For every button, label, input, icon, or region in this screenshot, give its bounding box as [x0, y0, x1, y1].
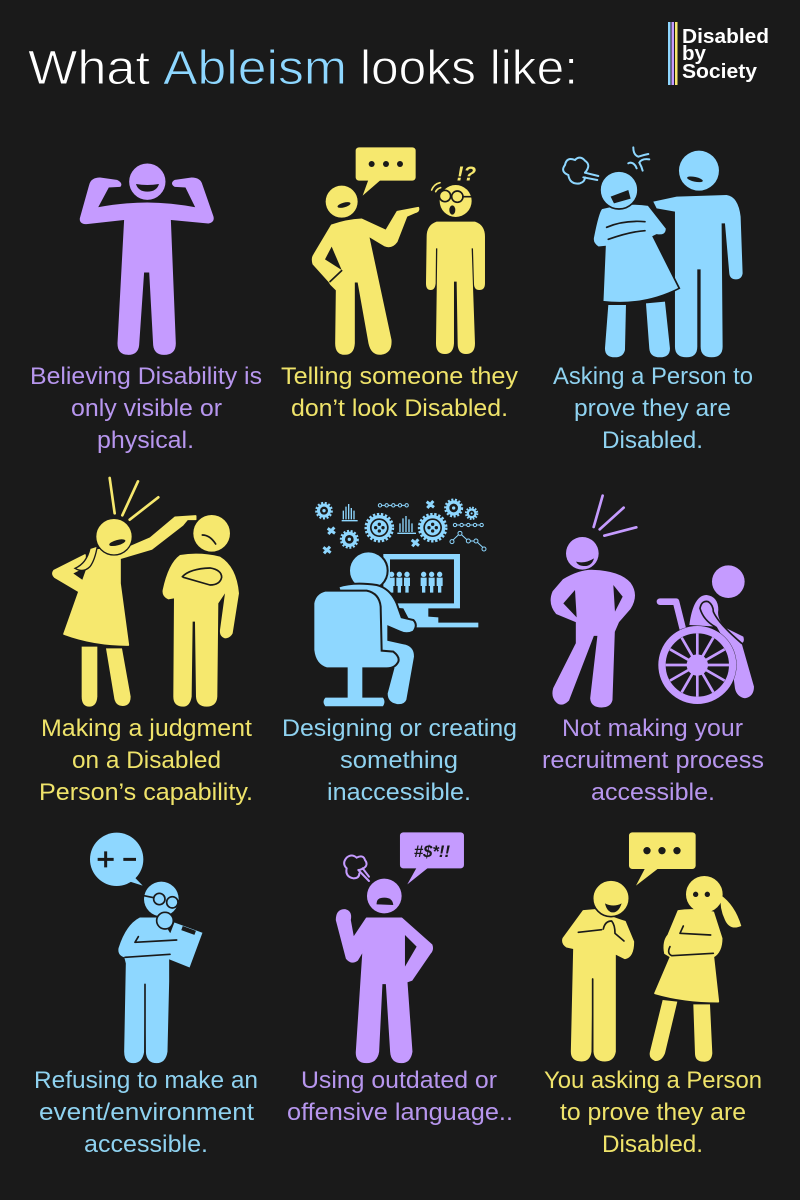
caption: outdated language — [287, 1067, 513, 1126]
caption: asking to prove — [553, 363, 753, 454]
caption: designing: Designing or creating — [282, 715, 517, 742]
panel: designing figure — [313, 500, 486, 707]
icon: person at chair — [313, 551, 416, 707]
icon: person with clipboard — [90, 833, 203, 1062]
caption: recruitment: accessible. — [591, 779, 715, 806]
caption: asking to prove: prove they are — [574, 395, 731, 422]
caption: you asking: You asking a Person — [544, 1067, 762, 1094]
caption: believing disability — [30, 363, 262, 454]
icon: monitor — [383, 554, 478, 627]
logo: Disabled by Society: Society — [682, 61, 758, 83]
caption: you asking: Disabled. — [602, 1131, 703, 1158]
caption: recruitment: recruitment process — [542, 747, 764, 774]
caption: you asking: to prove they are — [560, 1099, 746, 1126]
icon: standing person — [551, 496, 636, 707]
icon: two people talking — [313, 147, 485, 354]
caption: telling someone: Telling someone they — [281, 363, 518, 390]
logo: Disabled by Society: by — [682, 43, 707, 65]
icon: flexing person — [81, 163, 213, 354]
panel: judgment figure — [53, 478, 239, 707]
caption: designing: inaccessible. — [327, 779, 471, 806]
panel: event figures — [90, 832, 464, 1062]
caption: refusing: Refusing to make an — [34, 1067, 258, 1094]
logo: Disabled by Society — [668, 22, 769, 85]
panel: telling someone figure — [313, 147, 743, 357]
title: looks like: — [360, 42, 578, 95]
icon: gears and charts — [316, 500, 486, 553]
caption: refusing — [34, 1067, 258, 1158]
caption: telling someone — [281, 363, 518, 422]
icon: man and woman talking — [563, 832, 741, 1062]
title — [28, 42, 578, 95]
panel: asking to prove figure — [563, 832, 741, 1062]
title: What — [28, 42, 150, 95]
caption: judgment — [39, 715, 253, 806]
logo: Disabled by Society: Disabled — [682, 26, 769, 48]
caption: you asking — [544, 1067, 762, 1158]
caption: designing: something — [340, 747, 458, 774]
caption: asking to prove: Disabled. — [602, 427, 703, 454]
icon: woman pointing at man — [53, 478, 239, 707]
panel: recruitment figure — [551, 496, 754, 707]
caption: telling someone: don’t look Disabled. — [291, 395, 508, 422]
icon: angry person swearing — [337, 832, 464, 1062]
caption: refusing: event/environment — [39, 1099, 254, 1126]
caption: judgment: Making a judgment — [41, 715, 252, 742]
icon: wheelchair user — [658, 565, 754, 704]
caption: believing disability: Believing Disability is — [30, 363, 262, 390]
caption: judgment: on a Disabled — [72, 747, 221, 774]
caption: designing — [282, 715, 517, 806]
caption: believing disability: only visible or — [71, 395, 222, 422]
caption: judgment: Person’s capability. — [39, 779, 253, 806]
caption: recruitment — [542, 715, 764, 806]
panel: visible or physical figure — [81, 163, 213, 354]
caption: refusing: accessible. — [84, 1131, 208, 1158]
icon: angry person swearing: #$*!! — [414, 842, 450, 861]
caption: believing disability: physical. — [97, 427, 194, 454]
caption: outdated language: offensive language.. — [287, 1099, 513, 1126]
icon: upset woman and man — [563, 147, 743, 357]
icon: two people talking: !? — [457, 163, 477, 186]
caption: asking to prove: Asking a Person to — [553, 363, 753, 390]
caption: recruitment: Not making your — [562, 715, 743, 742]
caption: outdated language: Using outdated or — [301, 1067, 497, 1094]
title: Ableism — [163, 42, 347, 95]
